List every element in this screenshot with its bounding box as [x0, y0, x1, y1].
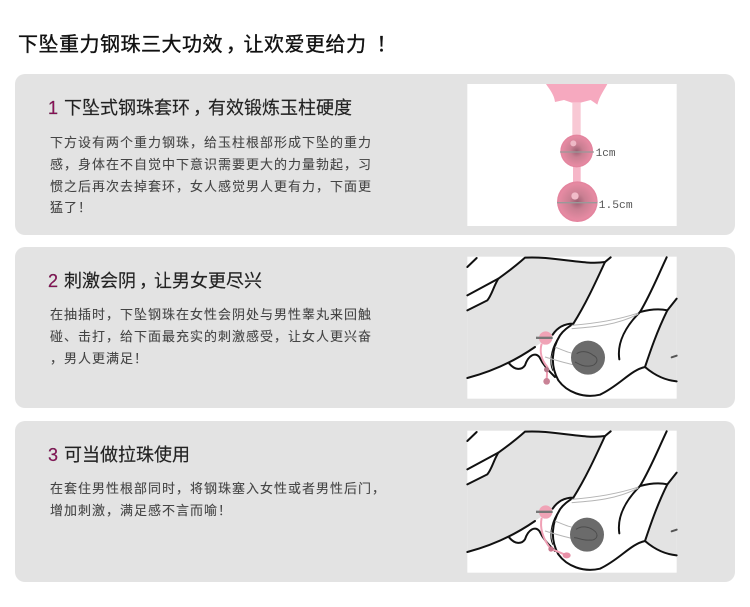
panel: stimulation	[15, 247, 735, 408]
text block 3: 增加刺激，满足感不言而喻！	[50, 503, 232, 518]
pink beads	[536, 505, 571, 558]
heading 3: 可当做拉珠使用	[64, 445, 190, 465]
text block 3: 在套住男性根部同时，将钢珠塞入女性或者男性后门，	[50, 481, 386, 496]
heading 2: 2	[48, 271, 58, 291]
text block 3	[50, 481, 386, 518]
text block 1: 感，身体在不自觉中下意识需要更大的力量勃起，习	[50, 157, 372, 172]
text block 2: 碰、击打，给下面最充实的刺激感受，让女人更兴奋	[50, 329, 372, 344]
text block 1: 猛了！	[50, 200, 92, 215]
small bead	[560, 135, 593, 167]
heading 1: 下坠式钢珠套环，有效锻炼玉柱硬度	[64, 98, 352, 118]
heading 3: 3	[48, 445, 58, 465]
large bead	[557, 181, 598, 222]
pink beads	[536, 331, 553, 385]
icon: butterfly	[546, 84, 607, 105]
text block 1: 惯之后再次去掉套环，女人感觉男人更有力，下面更	[50, 179, 372, 194]
text block 2: ，男人更满足！	[50, 351, 148, 366]
heading 2: 刺激会阴，让男女更尽兴	[64, 271, 262, 291]
stem	[572, 103, 581, 138]
text block 1	[50, 135, 372, 215]
text block 1: 下方设有两个重力钢珠，给玉柱根部形成下坠的重力	[50, 135, 372, 150]
grey circle	[571, 341, 605, 375]
text block 2	[50, 307, 372, 366]
illustration: line diagram with hanging beads	[466, 256, 678, 399]
text block 2: 在抽插时，下坠钢珠在女性会阴处与男性睾丸来回触	[50, 307, 372, 322]
title: 下坠重力钢珠三大功效，让欢爱更给力 ！	[18, 34, 397, 56]
grey circle	[570, 518, 604, 552]
product image: two weighted beads	[467, 84, 677, 226]
panel: anal beads use	[15, 421, 735, 582]
panel: steel ball ring	[15, 74, 735, 235]
illustration: line diagram with inserted beads	[466, 430, 678, 573]
product image: two weighted beads: 1.5cm	[599, 200, 633, 212]
heading 1: 1	[48, 98, 58, 118]
product image: two weighted beads: 1cm	[596, 148, 616, 160]
